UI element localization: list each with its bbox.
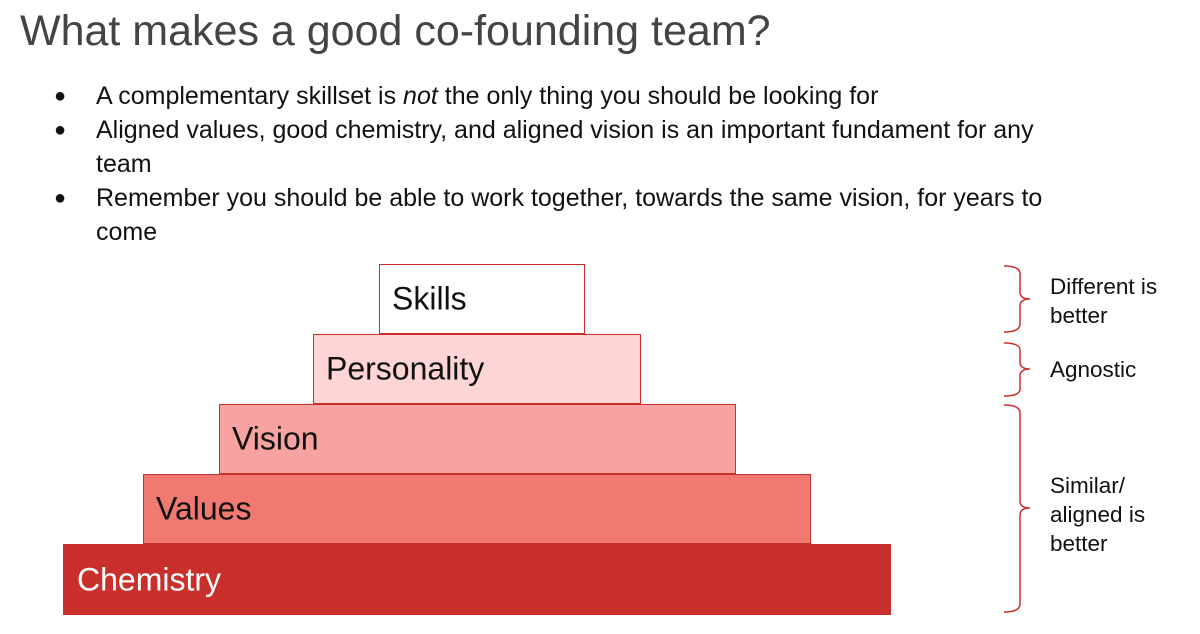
label: similar aligned is better <box>1050 473 1145 556</box>
bullet list: ● <box>54 85 66 107</box>
layer: personality <box>313 334 641 404</box>
layer: vision <box>219 404 736 474</box>
label: similar aligned is better: Similar/ <box>1050 473 1125 498</box>
bullet list <box>54 82 1042 246</box>
layer: chemistry: Chemistry <box>77 561 221 597</box>
bullet list: A complementary skillset is not the only thing you should be looking for <box>96 82 878 110</box>
layer: chemistry <box>63 544 891 615</box>
label: different is better: better <box>1050 303 1108 328</box>
layer: skills <box>379 264 585 334</box>
label: agnostic: Agnostic <box>1050 357 1136 382</box>
pyramid <box>63 264 891 615</box>
label: similar aligned is better: aligned is <box>1050 502 1145 527</box>
title: What makes a good co-founding team? <box>20 7 771 55</box>
label: different is better <box>1050 274 1157 328</box>
bullet list: come <box>96 218 157 246</box>
layer: personality: Personality <box>326 350 484 386</box>
layer: skills: Skills <box>392 280 467 316</box>
bullet list: ● <box>54 187 66 209</box>
layer: vision: Vision <box>232 420 319 456</box>
label: different is better: Different is <box>1050 274 1157 299</box>
bullet list: team <box>96 150 152 178</box>
bullet list: ● <box>54 119 66 141</box>
label: similar aligned is better: better <box>1050 531 1108 556</box>
bullet list: Remember you should be able to work together, towards the same vision, for years to <box>96 184 1042 212</box>
layer: values <box>143 474 811 544</box>
layer: values: Values <box>156 490 251 526</box>
bullet list: Aligned values, good chemistry, and aligned vision is an important fundament for any <box>96 116 1034 144</box>
